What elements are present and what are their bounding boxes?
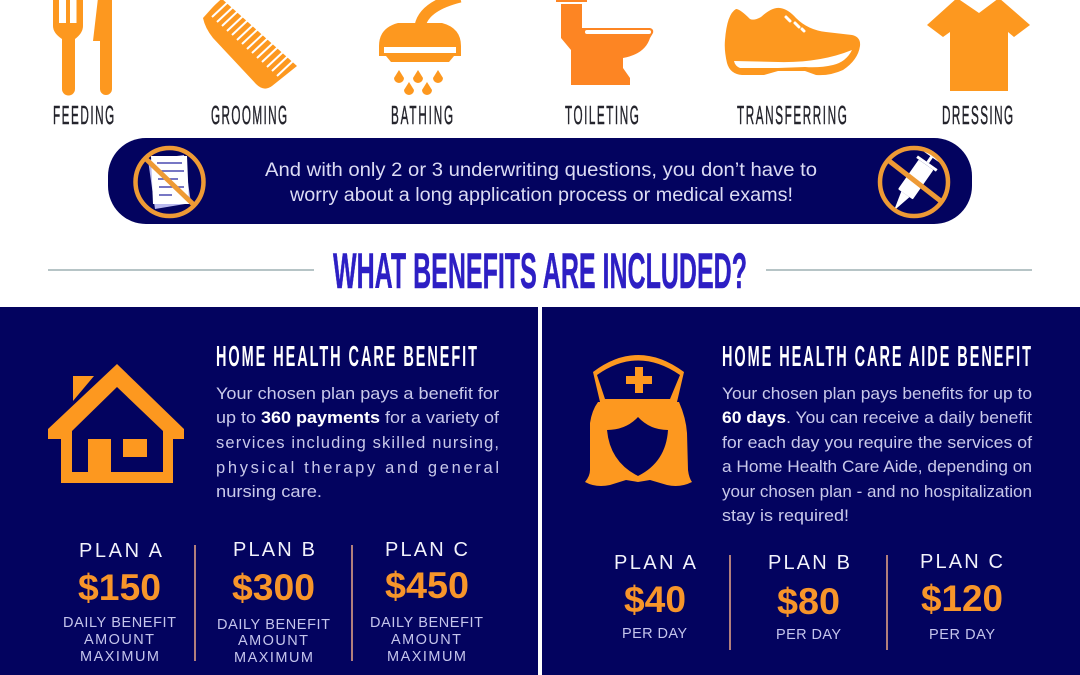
icon: comb <box>203 0 297 89</box>
plan b: MAXIMUM <box>234 650 313 666</box>
plan a: DAILY BENEFIT <box>63 615 176 631</box>
plan b: AMOUNT <box>238 633 308 649</box>
description: Your chosen plan pays a benefit for <box>216 385 500 403</box>
description: stay is required! <box>722 507 849 525</box>
icon: toilet <box>556 0 653 85</box>
description: 60 days. You can receive a daily benefit <box>722 409 1032 427</box>
panel: home health care benefit <box>0 307 538 675</box>
plan a: AMOUNT <box>84 632 154 648</box>
plan a: $150 <box>78 567 161 608</box>
heading: home health care benefit: HOME HEALTH CARE BENEFIT <box>216 339 477 372</box>
callout: no long application <box>108 138 972 224</box>
icon: shower head <box>379 0 461 95</box>
callout text <box>265 160 817 206</box>
plan a: PER DAY <box>622 626 687 642</box>
plan c: DAILY BENEFIT <box>370 615 483 631</box>
plan c: MAXIMUM <box>387 649 466 665</box>
plan c: AMOUNT <box>391 632 461 648</box>
description: a Home Health Care Aide, depending on <box>722 458 1032 476</box>
heading: home health care aide benefit: HOME HEALTH CARE AIDE BENEFIT <box>722 339 1031 372</box>
description: services including skilled nursing, <box>216 434 499 452</box>
plan c <box>920 551 1003 643</box>
description: for each day you require the services of <box>722 434 1032 452</box>
icon: nurse <box>585 355 692 486</box>
description: Your chosen plan pays benefits for up to <box>722 385 1032 403</box>
description: up to 360 payments for a variety of <box>216 409 499 427</box>
label: dressing: DRESSING <box>942 102 1013 130</box>
icon: no paperwork <box>136 148 204 216</box>
icon: shoe <box>725 8 860 75</box>
plan a: $40 <box>624 579 686 620</box>
plan a: PLAN A <box>79 540 163 562</box>
plan b: $80 <box>777 581 840 622</box>
plan b: $300 <box>232 567 315 608</box>
icon: shirt <box>927 0 1030 91</box>
plan b: PER DAY <box>776 627 841 643</box>
plan c: $120 <box>921 578 1003 619</box>
description <box>722 385 1032 525</box>
plan b: DAILY BENEFIT <box>217 617 330 633</box>
label: grooming: GROOMING <box>211 102 287 130</box>
plan b <box>217 539 330 666</box>
label: toileting: TOILETING <box>565 102 639 130</box>
description <box>216 385 500 501</box>
icon: fork and knife <box>53 0 112 96</box>
plan c: PLAN C <box>385 539 468 561</box>
plan b: PLAN B <box>768 552 850 574</box>
description: nursing care. <box>216 483 322 501</box>
plan a: MAXIMUM <box>80 649 159 665</box>
activities of daily living row <box>53 0 1030 130</box>
callout text: worry about a long application process or medical exams! <box>289 185 793 206</box>
label: feeding: FEEDING <box>53 102 114 130</box>
plan a <box>614 552 697 642</box>
icon: house <box>48 364 184 483</box>
plan c: PLAN C <box>920 551 1003 573</box>
plan a <box>63 540 176 665</box>
label: transferring: TRANSFERRING <box>737 102 847 130</box>
callout text: And with only 2 or 3 underwriting questions, you don’t have to <box>265 160 817 181</box>
plan a: PLAN A <box>614 552 697 574</box>
description: physical therapy and general <box>216 459 499 477</box>
label: bathing: BATHING <box>391 102 453 130</box>
icon: no injections <box>880 148 948 218</box>
plan c <box>370 539 483 665</box>
plan b <box>768 552 850 643</box>
description: your chosen plan - and no hospitalization <box>722 483 1032 501</box>
plan b: PLAN B <box>233 539 315 561</box>
plan c: PER DAY <box>929 627 995 643</box>
panel: home health care aide benefit <box>542 307 1080 675</box>
plan c: $450 <box>385 565 469 606</box>
